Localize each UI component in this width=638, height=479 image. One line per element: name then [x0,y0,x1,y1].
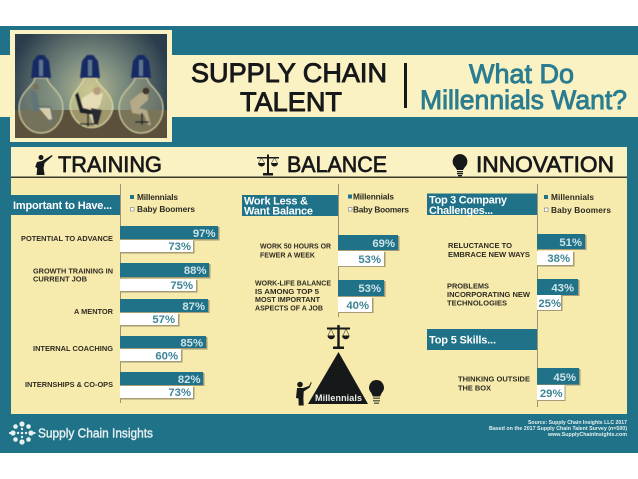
row: internships and co-ops: 73% [168,387,191,399]
heading: training: TRAINING [58,152,162,177]
row: growth training [33,263,210,292]
label box: top 3 company challenges: Challenges... [429,205,493,217]
axis [120,184,121,403]
panel: training chart [11,184,220,403]
row: reluctance: 51% [559,237,582,249]
legend: Baby Boomers [137,204,195,214]
logo mark [9,421,36,445]
label box: top 5 skills [427,329,537,350]
title: supply chain talent [191,58,387,117]
header rule [11,176,627,178]
row: work 50 hours [260,235,400,267]
label box: top 5 skills: Top 5 Skills... [429,334,496,346]
source note: Based on the 2017 Supply Chain Talent Survey (n=500) [489,426,627,432]
row: problems incorporating: 43% [551,282,574,294]
row: growth training: 75% [170,280,193,292]
icon: small bulb [369,380,384,404]
panel: balance chart [242,184,409,317]
row: potential to advance: POTENTIAL TO ADVANCE [21,236,113,243]
axis [537,184,538,407]
row: thinking outside the box: THINKING OUTSIDE [458,376,530,384]
row: reluctance [448,234,586,266]
row: work-life balance: 40% [346,300,369,312]
pyramid: millennials [308,352,368,404]
subtitle: what do millennials want: What Do [469,59,574,89]
row: a mentor: 57% [152,314,175,326]
icon: small teacher [296,382,312,406]
logo text: Supply Chain Insights [38,426,153,440]
row: internal coaching: 60% [155,350,178,362]
legend [130,192,195,214]
row: work 50 hours: WORK 50 HOURS OR [260,244,331,250]
icon: scales [257,154,279,176]
icon: large scales [327,325,350,349]
subtitle: what do millennials want [420,59,627,115]
row: a mentor: A MENTOR [74,309,113,316]
row: internships and co-ops: 82% [178,374,200,386]
label box: work less: Work Less & [244,196,308,208]
panel: innovation chart [427,184,611,407]
axis [338,184,339,317]
legend: Baby Boomers [353,204,409,214]
row: reluctance: 38% [547,253,570,265]
row: problems incorporating: 25% [538,298,561,310]
row: growth training: 88% [184,265,206,277]
row: problems incorporating: PROBLEMS [447,284,489,290]
row: internal coaching: 85% [180,338,203,350]
row: internal coaching [33,336,208,362]
pyramid: millennials: Millennials [315,393,362,403]
row: a mentor [74,299,210,326]
row: work-life balance: MOST IMPORTANT [255,297,321,304]
legend [544,192,611,215]
label box: work less [242,195,338,218]
row: thinking outside the box: THE BOX [458,386,491,392]
section header band [11,147,627,177]
row: a mentor: 87% [182,301,205,313]
row: work-life balance: 53% [358,283,381,295]
heading: balance: BALANCE [287,152,387,177]
subtitle: what do millennials want: Millennials Want? [420,85,627,115]
row: potential to advance [21,226,220,254]
row: reluctance: RELUCTANCE TO [448,243,513,250]
title: supply chain talent: TALENT [240,87,342,117]
source note [489,420,627,438]
main panel [11,147,627,414]
icon: light bulb [453,154,467,176]
title divider [404,63,407,108]
row: internships and co-ops [25,372,204,400]
row: problems incorporating: TECHNOLOGIES [447,300,507,308]
row: internships and co-ops: INTERNSHIPS & CO-OPS [25,382,113,389]
source note: Source: Supply Chain Insights LLC 2017 [528,420,627,426]
logo: supply chain insights [9,421,153,445]
row: thinking outside the box: 45% [553,372,576,384]
row: potential to advance: 73% [168,241,191,253]
header band [0,55,638,117]
row: reluctance: EMBRACE NEW WAYS [448,252,530,259]
legend [348,192,409,214]
label box: important to have: Important to Have... [13,200,112,212]
row: thinking outside the box: 29% [540,388,562,400]
title: supply chain talent: SUPPLY CHAIN [191,58,387,88]
source note: www.SupplyChainInsights.com [547,432,627,438]
row: work 50 hours: 53% [358,254,381,266]
legend: Millennials [137,192,178,202]
icon: teacher [35,155,53,175]
photo: people in light bulbs [10,30,172,142]
legend: Baby Boomers [551,205,611,215]
row: growth training: GROWTH TRAINING IN [33,268,113,276]
label box: top 3 company challenges [427,194,537,217]
row: thinking outside the box [458,368,580,401]
row: growth training: CURRENT JOB [33,276,87,284]
row: work-life balance: IS AMONG TOP 5 [255,289,319,296]
row: work 50 hours: FEWER A WEEK [260,252,315,260]
heading: innovation: INNOVATION [476,152,614,177]
legend: Millennials [353,192,394,202]
row: problems incorporating [447,279,580,311]
row: work-life balance: WORK-LIFE BALANCE [255,280,331,288]
row: potential to advance: 97% [193,228,216,240]
label box: important to have [11,195,120,215]
label box: top 3 company challenges: Top 3 Company [429,194,508,206]
row: internal coaching: INTERNAL COACHING [33,346,114,353]
row: problems incorporating: INCORPORATING NEW [447,292,530,299]
label box: work less: Want Balance [244,206,313,218]
row: work-life balance: ASPECTS OF A JOB [255,306,323,312]
row: work 50 hours: 69% [372,238,395,250]
legend: Millennials [551,192,594,202]
row: work-life balance [255,280,386,313]
